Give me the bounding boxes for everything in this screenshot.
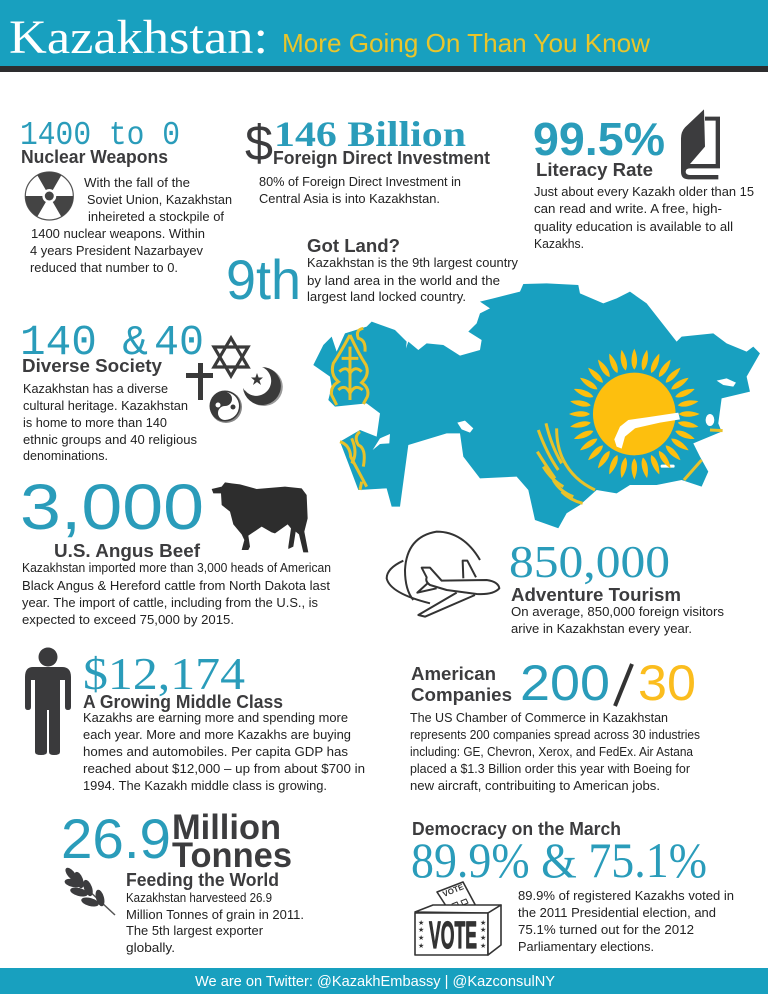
text: nuclear weapons body: Soviet Union, Kazakhstan: [87, 193, 232, 207]
panel: american companies: [410, 655, 700, 793]
stat: million tonnes: [172, 808, 292, 875]
text: companies body: new aircraft, contribuiting to American jobs.: [410, 779, 660, 793]
icon: book: [681, 109, 720, 179]
stat: 9th: 9th: [226, 248, 301, 311]
text: tourism body: On average, 850,000 foreign visitors: [511, 605, 724, 619]
icon: ballot box: ★: [418, 919, 424, 927]
text: middle class body: reached about $12,000 – up from about $700 in: [83, 762, 365, 776]
text: literacy body: Just about every Kazakh older than 15: [534, 185, 754, 199]
icon: bull: [212, 482, 308, 552]
stat: 1400 to 0: 1400 to 0: [20, 117, 180, 154]
heading: feeding the world: Feeding the World: [126, 870, 279, 890]
text: land body: by land area in the world and the: [307, 274, 500, 288]
icon: ballot box: ★: [418, 926, 424, 934]
heading: american companies: Companies: [411, 685, 512, 705]
heading: diverse society: Diverse Society: [22, 356, 162, 376]
title: Kazakhstan:: [9, 11, 268, 64]
text: grain body: Kazakhstan harvesteed 26.9: [126, 891, 272, 905]
text: investment body: Central Asia is into Kazakhstan.: [259, 192, 440, 206]
text: grain body: [126, 891, 304, 955]
stat: million tonnes: Tonnes: [172, 836, 292, 875]
map of Kazakhstan with flag design: [313, 283, 760, 528]
header banner: [0, 0, 768, 72]
panel: diverse society: [20, 318, 283, 463]
panel: feeding the world: [61, 807, 304, 955]
icons: religious symbols: [186, 338, 283, 423]
icon: wheat: [63, 866, 115, 915]
sun and rays: [569, 349, 700, 479]
icon: ballot box: ★: [480, 919, 486, 927]
stat: 200/30: 30: [638, 655, 696, 711]
text: nuclear weapons body: reduced that number to 0.: [30, 261, 178, 275]
text: middle class body: 1994. The Kazakh middle class is growing.: [83, 779, 327, 793]
text: beef body: year. The import of cattle, including from the U.S., is: [22, 596, 318, 610]
flag ornament: [331, 328, 368, 490]
text: democracy body: 89.9% of registered Kazakhs voted in: [518, 889, 734, 903]
text: companies body: including: GE, Chevron, Xerox, and FedEx. Air Astana: [410, 745, 693, 759]
panel: adventure tourism: [387, 532, 724, 636]
text: nuclear weapons body: 4 years President Nazarbayev: [30, 244, 204, 258]
stat: 146 billion: 146 Billion: [274, 114, 466, 154]
text: land body: [307, 256, 519, 304]
text: beef body: [22, 561, 331, 627]
stat: 200/30: [520, 655, 696, 711]
text: diverse society body: is home to more than 140: [23, 416, 167, 430]
text: investment body: [259, 175, 461, 206]
heading: foreign direct investment: Foreign Direct Investment: [273, 148, 490, 168]
text: middle class body: [83, 711, 365, 793]
stat: 26.9: 26.9: [61, 807, 171, 870]
text: democracy body: 75.1% turned out for the 2012: [518, 923, 694, 937]
text: literacy body: [534, 185, 754, 251]
text: diverse society body: [23, 382, 197, 463]
panel: democracy: [411, 819, 734, 957]
text: grain body: The 5th largest exporter: [126, 924, 263, 938]
text: tourism body: arive in Kazakhstan every year.: [511, 622, 692, 636]
text: middle class body: homes and automobiles. Per capita GDP has: [83, 745, 348, 759]
stat: 200/30: 200: [520, 655, 610, 711]
text: land body: largest land locked country.: [307, 290, 466, 304]
heading: american companies: [411, 664, 512, 705]
subtitle: More Going On Than You Know: [282, 28, 650, 58]
text: companies body: placed a $1.3 Billion order this year with Boeing for: [410, 762, 690, 776]
text: middle class body: each year. More and more Kazakhs are buying: [83, 728, 351, 742]
panel: nuclear weapons: [20, 117, 232, 275]
text: land body: Kazakhstan is the 9th largest country: [307, 256, 519, 270]
text: nuclear weapons body: inheireted a stockpile of: [88, 210, 225, 224]
heading: got land: Got Land?: [307, 236, 400, 256]
icon: ballot box: ★: [418, 942, 424, 950]
lakes: [373, 378, 736, 468]
text: investment body: 80% of Foreign Direct Investment in: [259, 175, 461, 189]
panel: foreign direct investment: [245, 114, 490, 206]
heading: democracy on the march: Democracy on the March: [412, 819, 621, 839]
stat: $12,174: $12,174: [83, 648, 245, 699]
text: companies body: [410, 711, 700, 793]
text: middle class body: Kazakhs are earning more and spending more: [83, 711, 348, 725]
icon: ballot box: ★: [418, 934, 424, 942]
stat: 3,000: 3,000: [20, 471, 204, 543]
icon: ballot box: ★: [480, 934, 486, 942]
text: grain body: Million Tonnes of grain in 2011.: [126, 908, 304, 922]
panel: got land: [226, 236, 519, 311]
text: tourism body: [511, 605, 724, 636]
footer banner: We are on Twitter: @KazakhEmbassy | @KazconsulNY: [195, 973, 555, 990]
heading: american companies: American: [411, 664, 496, 684]
panel: literacy rate: [533, 109, 754, 251]
text: companies body: The US Chamber of Commerce in Kazakhstan: [410, 711, 668, 725]
heading: middle class: A Growing Middle Class: [83, 692, 283, 712]
eagle wing ornament: [537, 423, 723, 503]
heading: literacy rate: Literacy Rate: [536, 160, 653, 180]
text: diverse society body: ethnic groups and 40 religious: [23, 433, 197, 447]
text: literacy body: quality education is available to all: [534, 220, 733, 234]
stat: million tonnes: Million: [172, 808, 281, 847]
panel: growing middle class: [25, 648, 365, 793]
text: democracy body: [518, 889, 734, 954]
text: democracy body: the 2011 Presidential election, and: [518, 906, 716, 920]
text: beef body: Kazakhstan imported more than 3,000 heads of American: [22, 561, 331, 575]
text: companies body: represents 200 companies spread across 30 industries: [410, 728, 700, 742]
icon: dollar sign: $: [245, 115, 273, 171]
text: literacy body: can read and write. A free, high-: [534, 202, 722, 216]
text: diverse society body: denominations.: [23, 449, 108, 463]
text: beef body: expected to exceed 75,000 by 2015.: [22, 613, 234, 627]
text: beef body: Black Angus & Hereford cattle from North Dakota last: [22, 579, 331, 593]
icon: ballot box: VOTE: [429, 915, 477, 957]
text: democracy body: Parliamentary elections.: [518, 940, 654, 954]
text: grain body: globally.: [126, 941, 175, 955]
icon: ballot box: ★: [480, 926, 486, 934]
stat: 140 & 40: 140 &: [20, 318, 148, 367]
panel: angus beef: [20, 471, 331, 627]
text: nuclear weapons body: 1400 nuclear weapons. Within: [31, 227, 205, 241]
text: diverse society body: cultural heritage. Kazakhstan: [23, 399, 188, 413]
text: nuclear weapons body: With the fall of the: [84, 176, 190, 190]
text: literacy body: Kazakhs.: [534, 237, 584, 251]
stat: 89.9% & 75.1%: 89.9% & 75.1%: [411, 832, 707, 888]
stat: 140 & 40: 40: [154, 318, 204, 367]
heading: adventure tourism: Adventure Tourism: [511, 585, 681, 605]
icon: airplane: [387, 532, 499, 617]
heading: angus beef: U.S. Angus Beef: [54, 541, 201, 561]
icon: ballot box: VOTE: [441, 882, 466, 899]
icon: person: [25, 648, 71, 755]
icon: ballot box: ★: [480, 942, 486, 950]
icon: radiation: [23, 172, 76, 220]
icon: ballot box: [415, 882, 501, 957]
text: nuclear weapons body: [30, 176, 232, 275]
footer banner: [0, 968, 768, 994]
heading: nuclear weapons: Nuclear Weapons: [21, 147, 168, 167]
stat: 99.5%: 99.5%: [533, 113, 665, 165]
text: diverse society body: Kazakhstan has a diverse: [23, 382, 168, 396]
stat: 850,000: 850,000: [509, 536, 670, 587]
